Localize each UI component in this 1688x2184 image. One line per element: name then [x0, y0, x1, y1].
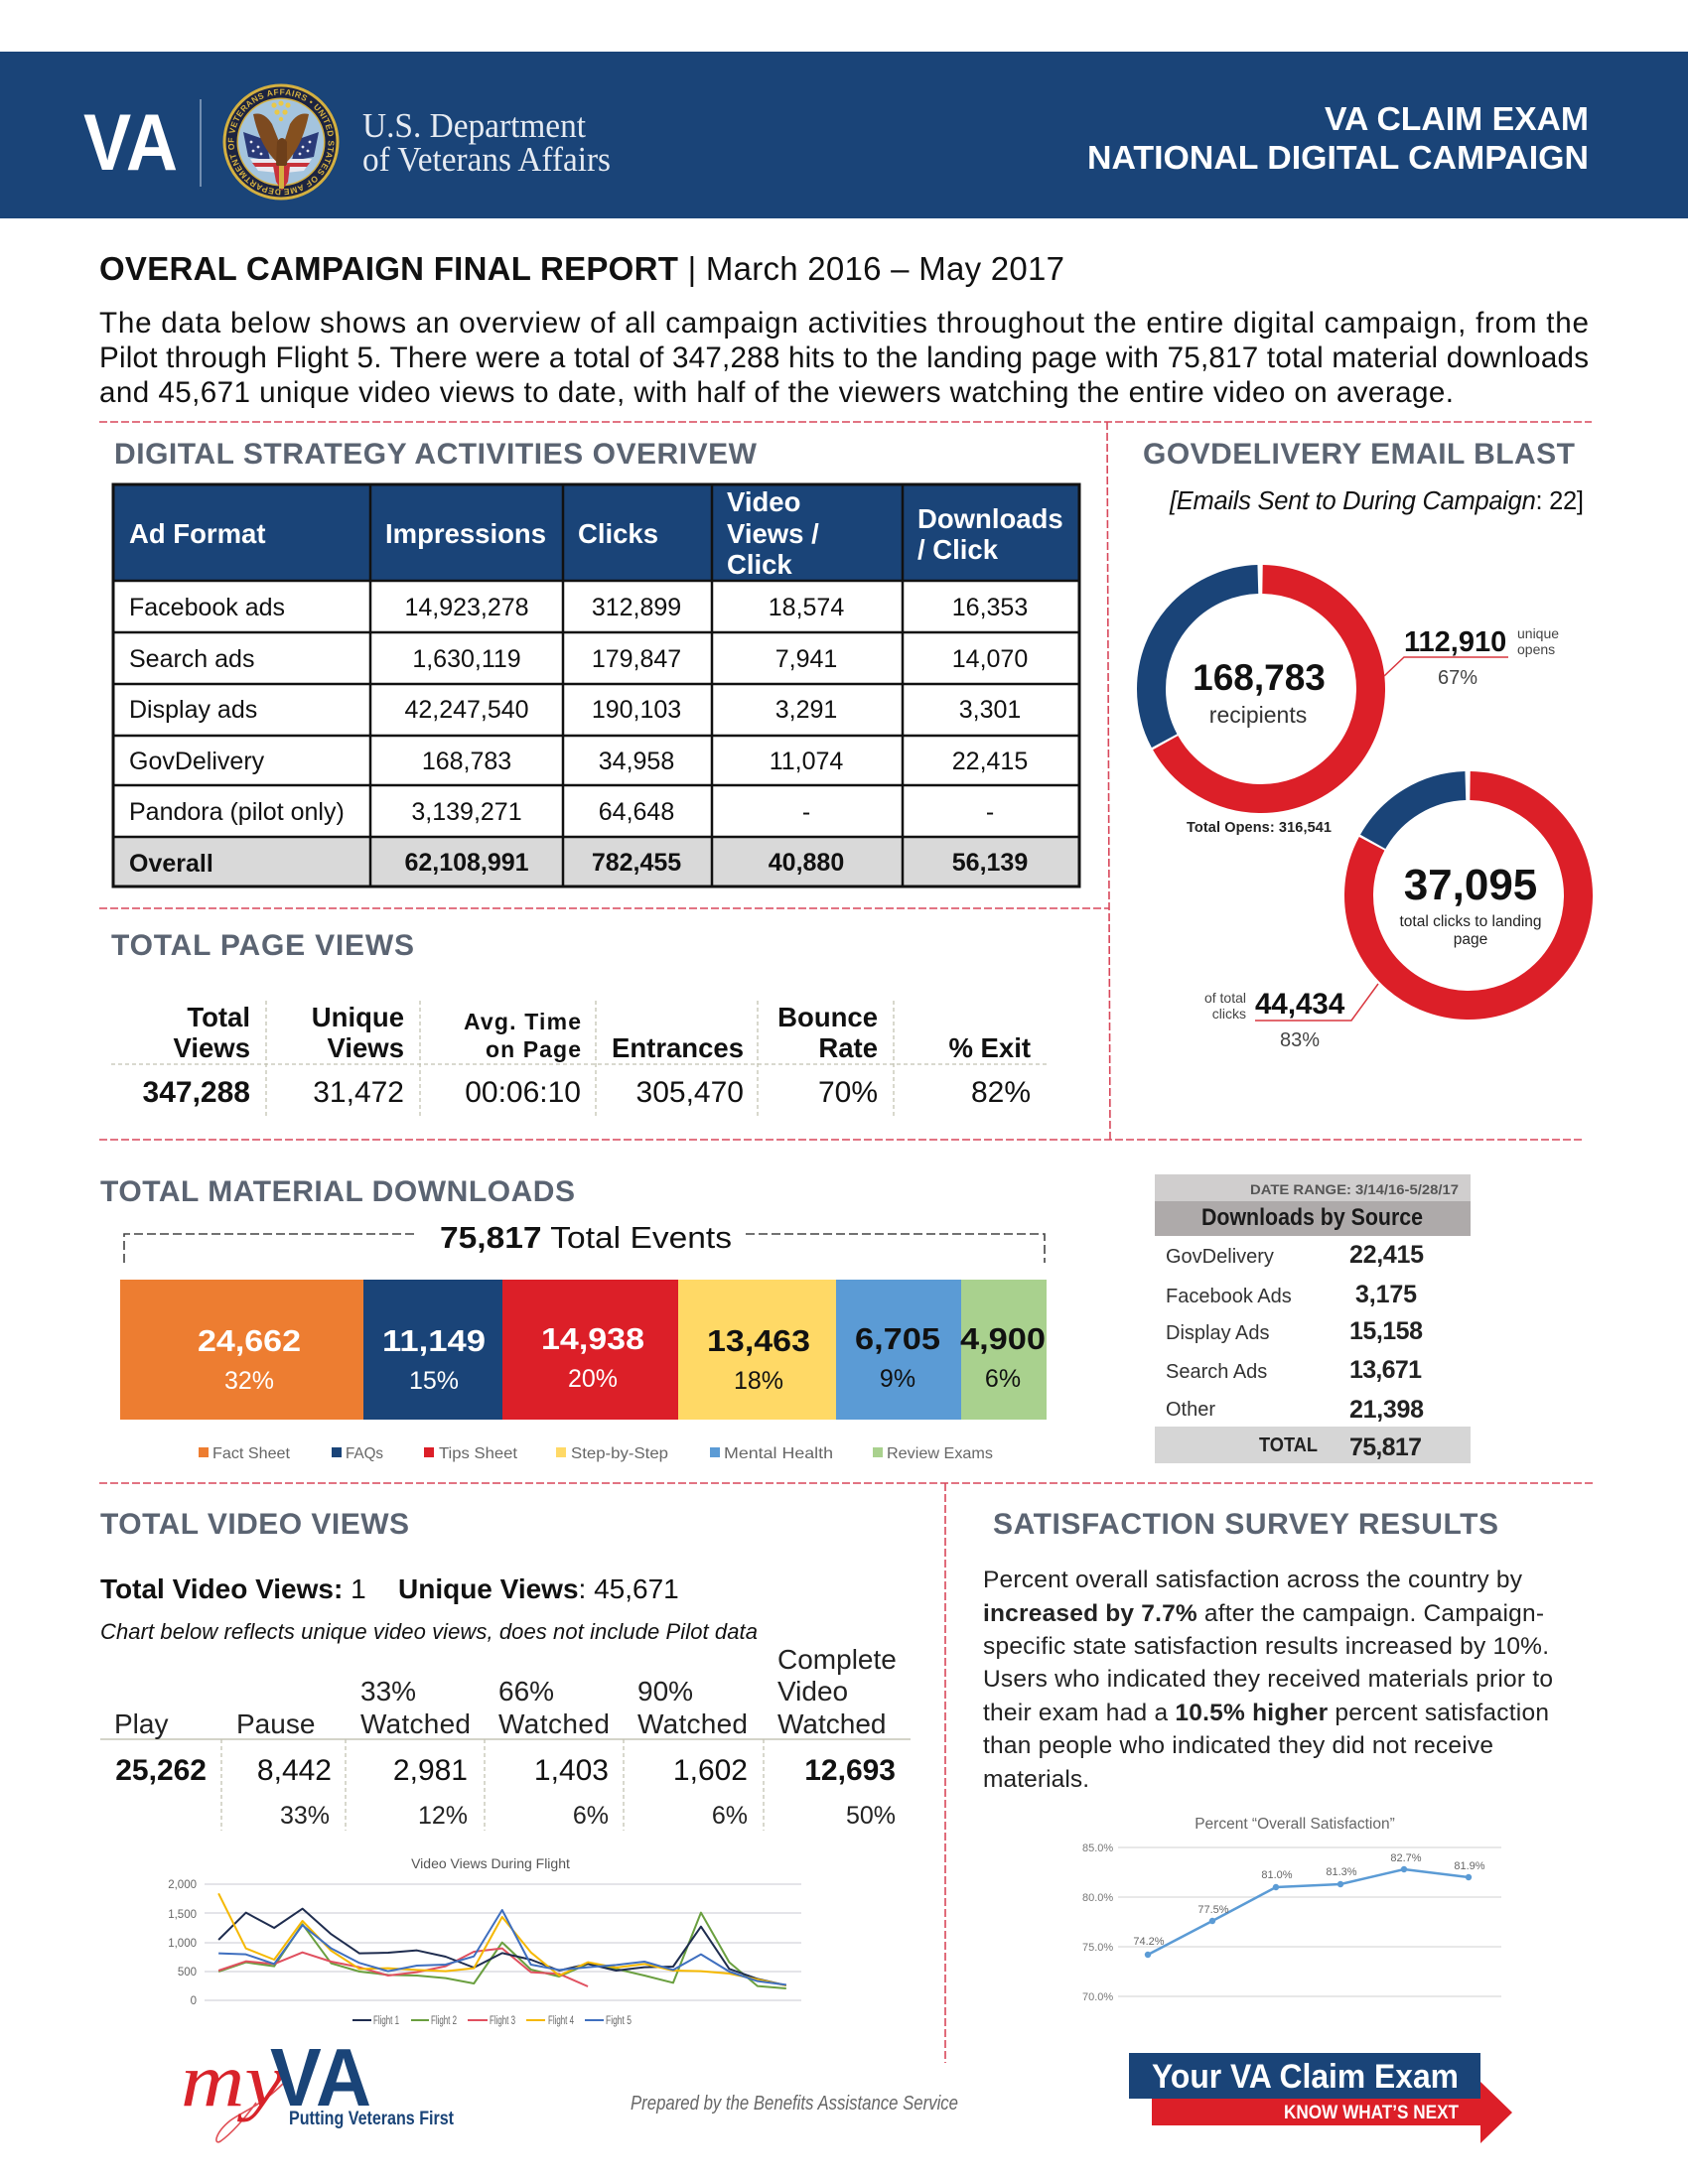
table: page view metrics: 00:06:10	[465, 1076, 581, 1109]
table rows: 1,630,119	[412, 645, 521, 673]
chart: percent overall satisfaction: 74.2%	[1133, 1936, 1165, 1948]
chart: video views during flight	[168, 1855, 801, 2027]
legend: material types: Step-by-Step	[571, 1445, 668, 1462]
table rows: 16,353	[952, 594, 1028, 621]
table header: Clicks	[578, 518, 658, 549]
text: video view totals: Total Video Views: 1	[100, 1573, 366, 1604]
table rows: Display ads	[129, 696, 257, 724]
header banner	[0, 52, 1688, 218]
chart: recipients donut: recipients	[1209, 702, 1307, 728]
table rows: 14,923,278	[404, 594, 529, 621]
callout: unique opens: 112,910	[1404, 626, 1506, 658]
chart: percent overall satisfaction: 77.5%	[1197, 1904, 1229, 1916]
logo: myVA: my	[181, 2039, 284, 2122]
table rows: 42,247,540	[404, 696, 529, 724]
table: page view metrics: on Page	[486, 1036, 581, 1062]
table rows: 3,301	[959, 696, 1021, 724]
heading: digital strategy activities: DIGITAL STRATEGY ACTIVITIES OVERIVEW	[114, 438, 758, 471]
table: video engagement: 12,693	[804, 1754, 896, 1787]
chart: percent overall satisfaction: 85.0%	[1082, 1843, 1113, 1854]
table header: / Click	[917, 534, 999, 565]
table rows: -	[986, 798, 994, 826]
table rows: 64,648	[599, 798, 674, 826]
line: flight 2	[218, 1913, 786, 1988]
logo: myVA: Putting Veterans First	[289, 2108, 454, 2129]
table header: Views /	[727, 518, 819, 549]
chart: landing page clicks donut: total clicks to landing	[1399, 913, 1542, 930]
table rows: 56,139	[952, 849, 1028, 877]
chart: landing page clicks donut: 37,095	[1404, 861, 1537, 909]
table: video engagement: 2,981	[393, 1754, 468, 1787]
table: page view metrics: Views	[174, 1032, 250, 1063]
text: satisfaction summary: specific state satisfaction results increased by 10%.	[983, 1633, 1549, 1660]
table: video engagement: 33%	[360, 1676, 416, 1706]
campaign title: NATIONAL DIGITAL CAMPAIGN	[1087, 139, 1589, 176]
chart: percent overall satisfaction: 75.0%	[1082, 1942, 1113, 1954]
legend: material types: FAQs	[346, 1445, 383, 1462]
table header: Ad Format	[129, 518, 266, 549]
heading: total video views: TOTAL VIDEO VIEWS	[100, 1508, 409, 1541]
callout: unique opens: opens	[1517, 641, 1555, 657]
table: page view metrics: Bounce	[777, 1002, 878, 1032]
table: page view metrics: % Exit	[948, 1032, 1031, 1063]
chart: percent overall satisfaction	[1082, 1816, 1501, 2003]
logo: your VA claim exam arrow: Your VA Claim Exam	[1152, 2058, 1459, 2096]
chart: material downloads stacked bar: 6%	[985, 1365, 1021, 1393]
bracket: total events: 75,817 Total Events	[440, 1220, 732, 1255]
text: satisfaction summary: materials.	[983, 1766, 1089, 1793]
intro paragraph: and 45,671 unique video views to date, with half of the viewers watching the entire video on average.	[99, 376, 1454, 409]
table rows: -	[802, 798, 810, 826]
table rows: Facebook ads	[129, 594, 285, 621]
table: page view metrics: 82%	[971, 1076, 1031, 1109]
table: video engagement: Video	[777, 1676, 848, 1706]
table: downloads by source: 13,671	[1349, 1356, 1422, 1384]
icon: department seal	[222, 83, 340, 201]
table rows: 18,574	[769, 594, 844, 621]
table rows: 3,139,271	[411, 798, 522, 826]
table header: Impressions	[385, 518, 546, 549]
chart: recipients donut	[1150, 578, 1559, 836]
chart: video views during flight: 0	[191, 1995, 197, 2007]
text: video view totals: : 45,671	[579, 1573, 679, 1604]
chart: material downloads stacked bar: 18%	[734, 1367, 783, 1395]
text: prepared by: Prepared by the Benefits Assistance Service	[631, 2093, 958, 2115]
logo: your VA claim exam arrow	[1129, 2053, 1512, 2143]
intro paragraph: Pilot through Flight 5. There were a total of 347,288 hits to the landing page with 75,817 total material downloads	[99, 341, 1589, 374]
table rows: 11,074	[770, 748, 843, 775]
chart: percent overall satisfaction: Percent “Overall Satisfaction”	[1195, 1816, 1395, 1833]
chart: material downloads stacked bar: 32%	[224, 1367, 274, 1395]
chart: video views during flight: 1,500	[168, 1909, 197, 1921]
callout: of total clicks	[1204, 984, 1378, 1051]
text: satisfaction summary: Percent overall satisfaction across the country by	[983, 1567, 1523, 1593]
logo: myVA: VA	[270, 2031, 371, 2123]
chart: percent overall satisfaction: 82.7%	[1390, 1852, 1422, 1864]
table rows: 3,291	[775, 696, 837, 724]
table: downloads by source: Search Ads	[1166, 1361, 1267, 1383]
chart: material downloads stacked bar: 6,705	[855, 1321, 940, 1356]
table: video engagement: Play	[114, 1708, 168, 1739]
chart: material downloads stacked bar: 11,149	[382, 1323, 486, 1358]
text: satisfaction summary: Users who indicated they received materials prior to	[983, 1666, 1553, 1693]
logo text: U.S. Department of Veterans Affairs: U.S. Department	[362, 106, 586, 145]
table: downloads by source: TOTAL	[1259, 1434, 1318, 1456]
intro paragraph	[99, 307, 1589, 409]
chart: percent overall satisfaction: 81.9%	[1454, 1860, 1485, 1872]
table: downloads by source: Facebook Ads	[1166, 1286, 1292, 1307]
table: video engagement: 33%	[280, 1802, 330, 1830]
callout: of total clicks: 83%	[1280, 1029, 1320, 1051]
legend: flights: Fight 5	[606, 2015, 632, 2027]
table: video engagement: 12%	[418, 1802, 468, 1830]
table: page view metrics: Avg. Time	[464, 1009, 581, 1034]
callout: unique opens: 67%	[1438, 667, 1477, 689]
chart: material downloads stacked bar: 4,900	[960, 1321, 1046, 1356]
callout: of total clicks: clicks	[1212, 1006, 1246, 1022]
chart: material downloads stacked bar: 14,938	[541, 1321, 644, 1356]
table rows: 7,941	[775, 645, 837, 673]
bracket: total events	[124, 1220, 1045, 1263]
table: video engagement: 6%	[573, 1802, 609, 1830]
chart: video views during flight: 500	[178, 1967, 197, 1979]
chart: recipients donut: 168,783	[1193, 657, 1326, 698]
logo: your VA claim exam arrow: KNOW WHAT’S NEXT	[1284, 2103, 1459, 2123]
table rows: Overall	[129, 850, 213, 878]
table rows: GovDelivery	[129, 748, 265, 775]
table: video engagement: Watched	[777, 1708, 886, 1739]
callout: of total clicks: of total	[1204, 990, 1246, 1006]
chart: material downloads stacked bar	[120, 1220, 1047, 1462]
table: video engagement: 1,403	[534, 1754, 609, 1787]
chart: landing page clicks donut	[1204, 784, 1580, 1051]
table: page view metrics: Rate	[818, 1032, 878, 1063]
table header: Click	[727, 549, 792, 580]
table: downloads by source: 75,817	[1349, 1433, 1422, 1461]
text: total opens: Total Opens: 316,541	[1187, 820, 1332, 836]
table: page view metrics: 70%	[818, 1076, 878, 1109]
table header: Downloads	[917, 503, 1063, 534]
report title: OVERAL CAMPAIGN FINAL REPORT | March 2016 – May 2017	[99, 250, 1064, 287]
text: emails sent: [Emails Sent to During Campaign: 22]	[1169, 487, 1584, 515]
legend: material types	[199, 1445, 993, 1462]
text: video view totals: Unique Views	[398, 1573, 579, 1604]
table: video engagement: Pause	[236, 1708, 315, 1739]
table: downloads by source: Other	[1166, 1399, 1215, 1421]
table header	[129, 486, 1063, 580]
legend: material types: Fact Sheet	[212, 1445, 291, 1462]
chart: material downloads stacked bar: 13,463	[707, 1323, 810, 1358]
table: downloads by source: DATE RANGE: 3/14/16-5/28/17	[1250, 1181, 1459, 1197]
campaign title	[1087, 100, 1589, 176]
text: chart note: Chart below reflects unique video views, does not include Pilot data	[100, 1619, 758, 1644]
heading: satisfaction survey results: SATISFACTION SURVEY RESULTS	[993, 1508, 1498, 1541]
chart: material downloads stacked bar: 9%	[880, 1365, 915, 1393]
legend: material types: Tips Sheet	[439, 1445, 518, 1462]
line: flight 1	[218, 1909, 786, 1985]
table: downloads by source: 15,158	[1349, 1317, 1423, 1345]
logo text: U.S. Department of Veterans Affairs	[362, 106, 611, 179]
table: ad format activity	[113, 484, 1079, 887]
legend: material types: Mental Health	[724, 1445, 833, 1462]
callout: of total clicks: 44,434	[1255, 988, 1345, 1021]
heading: total material downloads: TOTAL MATERIAL DOWNLOADS	[100, 1175, 575, 1208]
table rows: 782,455	[592, 849, 681, 877]
table rows: 312,899	[592, 594, 681, 621]
table: video engagement: 1,602	[673, 1754, 748, 1787]
text: satisfaction summary: than people who indicated they did not receive	[983, 1732, 1493, 1759]
text: satisfaction summary: increased by 7.7% after the campaign. Campaign-	[983, 1600, 1544, 1627]
table: page view metrics: Entrances	[612, 1032, 744, 1063]
table rows: 40,880	[769, 849, 844, 877]
line: flight 3	[218, 1949, 588, 1986]
table: downloads by source: 22,415	[1349, 1241, 1424, 1269]
heading: govdelivery email blast: GOVDELIVERY EMAIL BLAST	[1143, 438, 1575, 471]
table rows: Pandora (pilot only)	[129, 798, 345, 826]
table: downloads by source: Downloads by Source	[1201, 1204, 1423, 1231]
table: page view metrics: Total	[187, 1002, 250, 1032]
legend: flights: Flight 3	[490, 2015, 515, 2027]
table: video engagement: 25,262	[115, 1754, 207, 1787]
legend: flights: Flight 2	[431, 2015, 457, 2027]
campaign title: VA CLAIM EXAM	[1325, 100, 1589, 137]
table rows: 168,783	[422, 748, 511, 775]
chart: material downloads stacked bar: 15%	[409, 1367, 459, 1395]
table rows: 14,070	[952, 645, 1028, 673]
chart: percent overall satisfaction: 81.0%	[1261, 1869, 1293, 1881]
table: video engagement: Watched	[498, 1708, 610, 1739]
chart: material downloads stacked bar: 24,662	[198, 1323, 301, 1358]
table: page view metrics: Views	[328, 1032, 404, 1063]
chart: video views during flight: Video Views During Flight	[411, 1855, 570, 1871]
legend: flights: Flight 4	[548, 2015, 574, 2027]
legend: flights: Flight 1	[373, 2015, 399, 2027]
legend: flights	[352, 2015, 632, 2027]
table: page view metrics: 31,472	[313, 1076, 404, 1109]
table: downloads by source: 3,175	[1355, 1281, 1417, 1308]
table: video engagement: Watched	[637, 1708, 748, 1739]
table: downloads by source: GovDelivery	[1166, 1246, 1274, 1268]
table rows: Search ads	[129, 645, 254, 673]
logo: VA: VA	[83, 98, 178, 188]
table: downloads by source	[1155, 1174, 1471, 1463]
heading: total page views: TOTAL PAGE VIEWS	[111, 929, 414, 962]
table: video engagement: 90%	[637, 1676, 693, 1706]
table: downloads by source: 21,398	[1349, 1396, 1424, 1424]
table rows: 22,415	[952, 748, 1028, 775]
line: flight 4	[218, 1893, 786, 1985]
logo: myVA	[181, 2031, 454, 2142]
chart: landing page clicks donut: page	[1454, 931, 1487, 948]
chart: percent overall satisfaction: 81.3%	[1326, 1866, 1357, 1878]
table: video engagement: Watched	[360, 1708, 471, 1739]
chart: material downloads stacked bar: 20%	[568, 1365, 618, 1393]
table rows	[129, 594, 1028, 878]
intro paragraph: The data below shows an overview of all campaign activities throughout the entire digital campaign, from the	[99, 307, 1589, 340]
line: flight 5	[218, 1910, 786, 1984]
text: satisfaction summary	[983, 1567, 1553, 1793]
table: video engagement: 6%	[712, 1802, 748, 1830]
chart: percent overall satisfaction: 70.0%	[1082, 1991, 1113, 2003]
table: page view metrics	[111, 1001, 1048, 1117]
chart: video views during flight: 2,000	[168, 1879, 197, 1891]
callout: unique opens: unique	[1517, 625, 1559, 641]
logo text: U.S. Department of Veterans Affairs: of Veterans Affairs	[362, 140, 611, 179]
table: video engagement: 8,442	[257, 1754, 332, 1787]
table: video engagement	[100, 1644, 911, 1831]
text: satisfaction summary: their exam had a 10.5% higher percent satisfaction	[983, 1700, 1549, 1726]
callout: unique opens	[1384, 625, 1559, 689]
table rows: 34,958	[599, 748, 674, 775]
table: video engagement: 50%	[846, 1802, 896, 1830]
table: page view metrics: Unique	[312, 1002, 404, 1032]
legend: material types: Review Exams	[887, 1445, 993, 1462]
chart: video views during flight: 1,000	[168, 1938, 197, 1950]
table: downloads by source: Display Ads	[1166, 1322, 1269, 1344]
table: page view metrics: 347,288	[143, 1076, 250, 1109]
chart: percent overall satisfaction: 80.0%	[1082, 1892, 1113, 1904]
table header: Video	[727, 486, 800, 517]
table rows: 190,103	[592, 696, 681, 724]
table rows: 179,847	[592, 645, 681, 673]
table rows: 62,108,991	[404, 849, 529, 877]
table: video engagement: Complete	[777, 1644, 897, 1675]
table: video engagement: 66%	[498, 1676, 554, 1706]
table: page view metrics: 305,470	[636, 1076, 744, 1109]
